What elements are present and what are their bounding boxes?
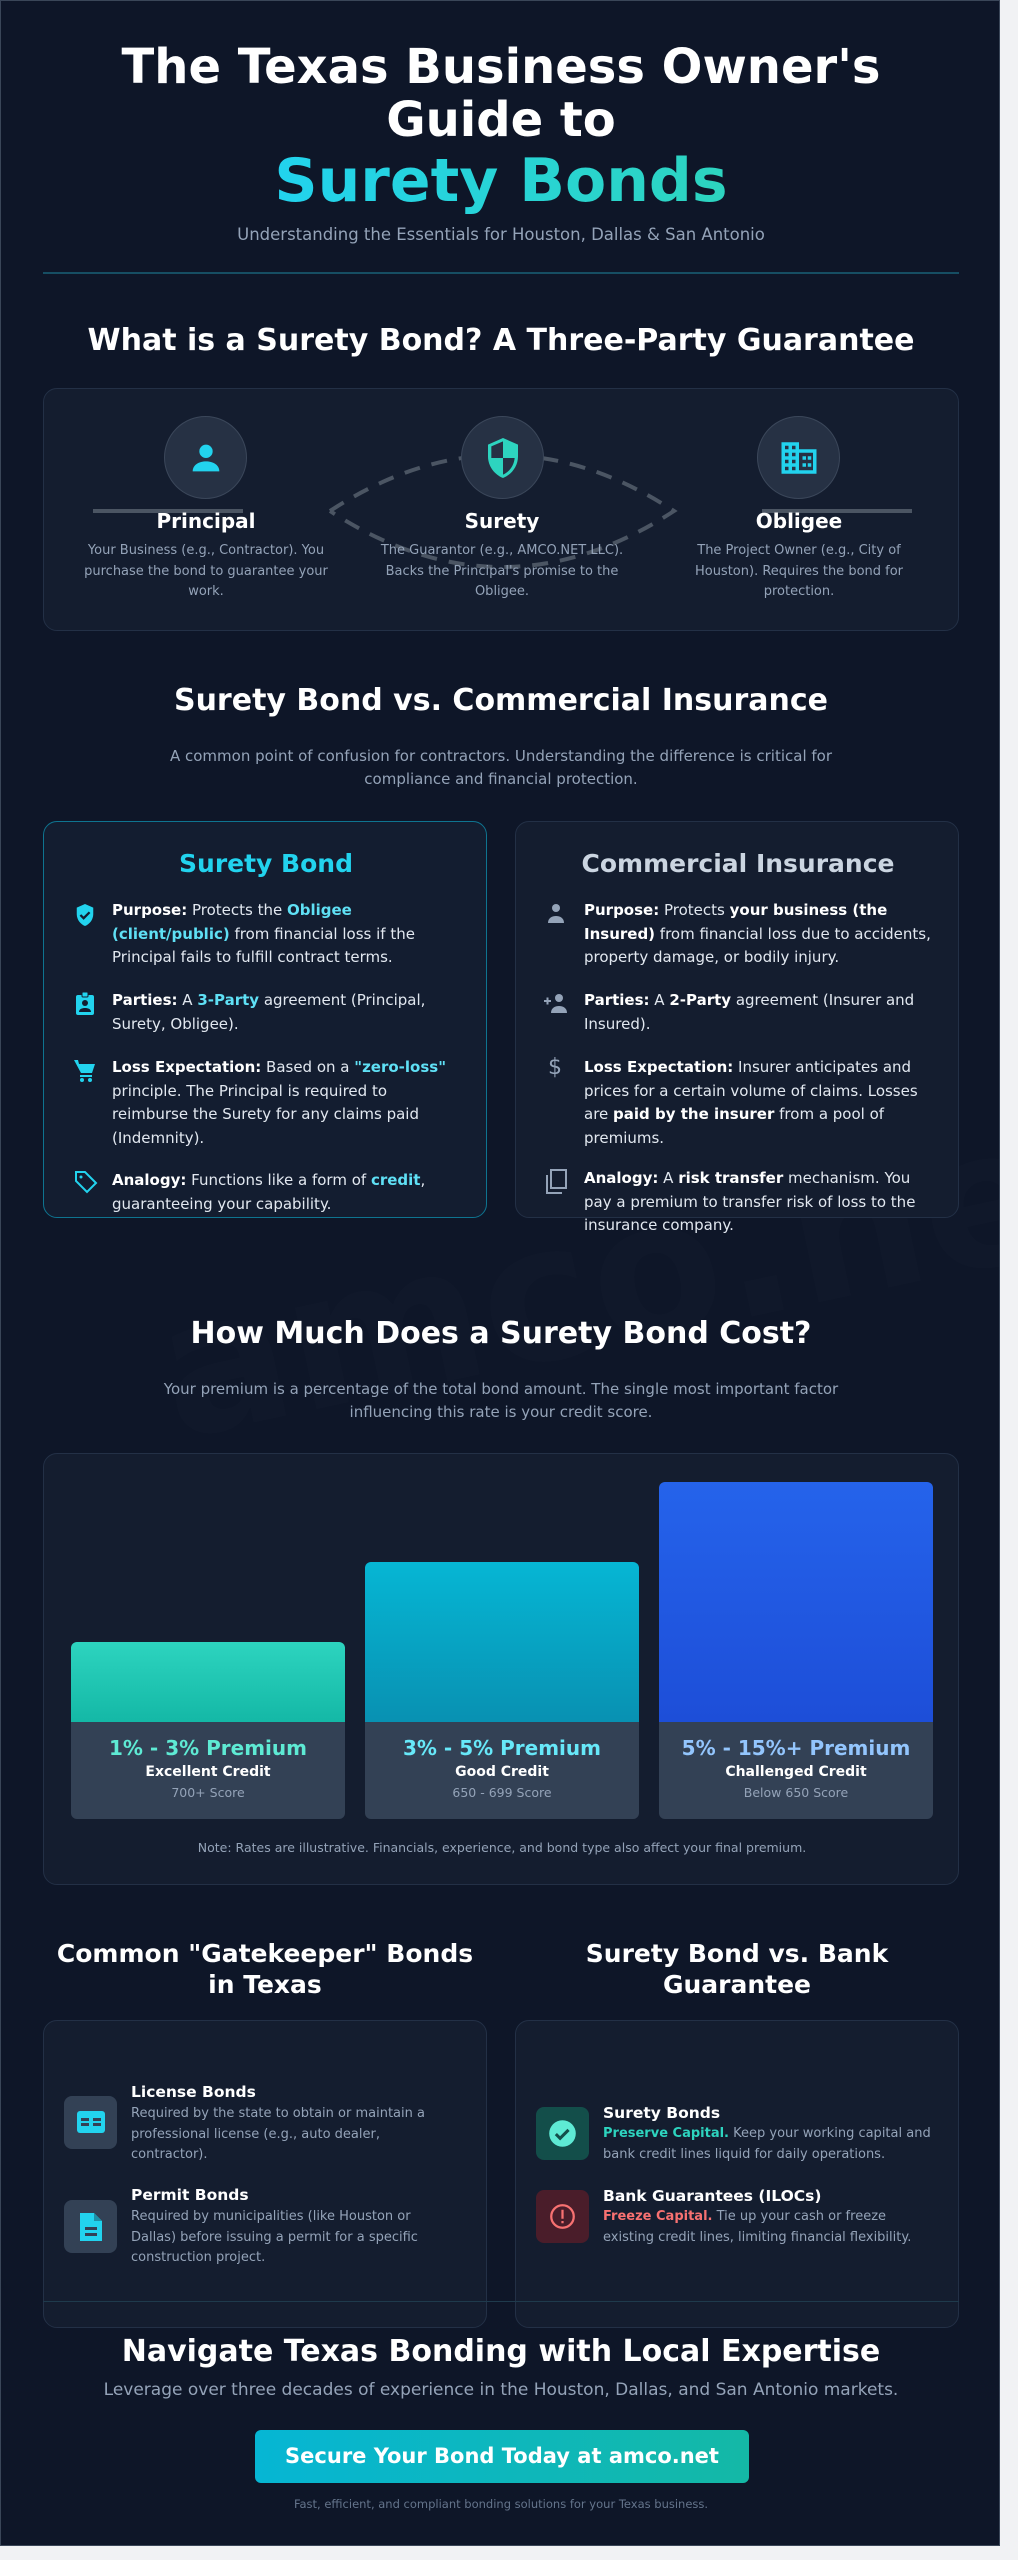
bar: good: 650 - 699 Score bbox=[452, 1785, 552, 1800]
diagram lines bbox=[93, 456, 912, 569]
icon: shield check bbox=[76, 904, 94, 926]
bar: good: 3% - 5% Premium bbox=[403, 1736, 601, 1760]
heading: navigate: Navigate Texas Bonding with Local Expertise bbox=[122, 2334, 880, 2369]
label: principal bbox=[84, 509, 328, 599]
icon: person add bbox=[544, 994, 567, 1013]
subtitle: vs insurance: A common point of confusion for contractors. Understanding the difference is critical for compliance and financial protection. bbox=[170, 747, 832, 788]
panel: bank guarantee: Preserve Capital. Keep your working capital and bank credit lines liquid for daily operations. bbox=[603, 2126, 931, 2162]
subtitle: Understanding the Essentials for Houston, Dallas & San Antonio bbox=[237, 225, 765, 244]
label: surety bbox=[380, 509, 623, 599]
text: surety bonds: Surety Bonds bbox=[603, 2104, 720, 2122]
label: surety: Surety bbox=[465, 509, 539, 533]
bar: excellent: 1% - 3% Premium bbox=[109, 1736, 307, 1760]
icon: tag bbox=[75, 1171, 98, 1194]
bar: excellent: 700+ Score bbox=[171, 1785, 245, 1800]
label: obligee: Obligee bbox=[756, 509, 842, 533]
card heading: Surety Bond bbox=[179, 849, 353, 878]
subtitle: cost: Your premium is a percentage of the total bond amount. The single most important factor influencing this rate is your credit score. bbox=[164, 1380, 838, 1421]
icon: check bbox=[536, 2107, 589, 2160]
icon: obligee building bbox=[757, 416, 840, 499]
item: analogy: Analogy: A risk transfer mechanism. You pay a premium to transfer risk of loss to the insurance company. bbox=[584, 1169, 915, 1234]
icon: alert bbox=[536, 2190, 589, 2243]
heading: cost: How Much Does a Surety Bond Cost? bbox=[191, 1316, 811, 1351]
heading: vs insurance: Surety Bond vs. Commercial Insurance bbox=[174, 683, 828, 718]
label: obligee: The Project Owner (e.g., City of Houston). Requires the bond for protection. bbox=[695, 543, 903, 599]
bar chart bbox=[43, 1453, 959, 1885]
icon: surety shield bbox=[461, 416, 544, 499]
text: permit bonds: Permit Bonds bbox=[131, 2186, 249, 2204]
heading: gatekeeper bonds: Common "Gatekeeper" Bonds in Texas bbox=[57, 1939, 473, 1999]
label: principal: Your Business (e.g., Contractor). You purchase the bond to guarantee your work. bbox=[84, 543, 328, 599]
panel: three-party diagram bbox=[43, 388, 959, 631]
panel: surety bond card bbox=[43, 821, 487, 1218]
bar: good: Good Credit bbox=[455, 1764, 549, 1780]
label: surety: The Guarantor (e.g., AMCO.NET LLC). Backs the Principal's promise to the Obligee. bbox=[381, 543, 623, 599]
icon: badge bbox=[76, 992, 94, 1015]
panel: bank guarantee: Freeze Capital. Tie up your cash or freeze existing credit lines, limiting financial flexibility. bbox=[603, 2209, 911, 2244]
subtitle: navigate: Leverage over three decades of experience in the Houston, Dallas, and San Antonio markets. bbox=[104, 2380, 898, 2400]
item: loss expectation: Loss Expectation: Based on a "zero-loss" principle. The Principal is required to reimburse the Surety for any claims paid (Indemnity). bbox=[112, 1058, 446, 1146]
panel: bank guarantee bbox=[515, 2020, 959, 2328]
bar: excellent: Excellent Credit bbox=[145, 1764, 271, 1780]
panel: gatekeeper bonds bbox=[43, 2020, 487, 2328]
icon: cart bbox=[74, 1060, 95, 1082]
bar: challenged bbox=[659, 1482, 933, 1819]
icon: dollar: $ bbox=[548, 1055, 562, 1080]
card heading: Commercial Insurance bbox=[582, 849, 894, 878]
panel: gatekeeper bonds: Required by the state to obtain or maintain a professional license (e.g., auto dealer, contractor). bbox=[131, 2106, 425, 2162]
button: CTA bbox=[255, 2430, 749, 2483]
bar: challenged: Below 650 Score bbox=[744, 1785, 848, 1800]
text: license bonds: License Bonds bbox=[131, 2083, 256, 2101]
icon: copy bbox=[546, 1169, 567, 1194]
item: purpose: Purpose: Protects the Obligee (client/public) from financial loss if the Principal fails to fulfill contract terms. bbox=[112, 901, 415, 966]
icon: license bbox=[64, 2096, 117, 2149]
icon: principal bbox=[164, 416, 247, 499]
bar: challenged: 5% - 15%+ Premium bbox=[682, 1736, 910, 1760]
title bbox=[122, 39, 880, 148]
icon: permit bbox=[64, 2200, 117, 2253]
button: CTA: Secure Your Bond Today at amco.net bbox=[285, 2444, 719, 2468]
title highlight: Surety Bonds bbox=[274, 146, 728, 216]
heading: three-party: What is a Surety Bond? A Three-Party Guarantee bbox=[88, 323, 914, 358]
bar: good bbox=[365, 1562, 639, 1819]
item: parties: Parties: A 3-Party agreement (Principal, Surety, Obligee). bbox=[112, 991, 425, 1032]
item: analogy: Analogy: Functions like a form of credit, guaranteeing your capability. bbox=[112, 1171, 425, 1212]
bar: excellent bbox=[71, 1642, 345, 1819]
icon: person bbox=[548, 904, 564, 923]
panel: gatekeeper bonds: Required by municipalities (like Houston or Dallas) before issuing a permit for a specific construction project. bbox=[131, 2209, 418, 2265]
bar: challenged: Challenged Credit bbox=[725, 1764, 867, 1780]
panel: commercial insurance card bbox=[515, 821, 959, 1218]
heading: bank guarantee: Surety Bond vs. Bank Guarantee bbox=[586, 1939, 888, 1999]
label: principal: Principal bbox=[156, 509, 256, 533]
title: The Texas Business Owner's bbox=[122, 39, 880, 95]
item: purpose: Purpose: Protects your business (the Insured) from financial loss due to accidents, property damage, or bodily injury. bbox=[584, 901, 931, 966]
chart note: Note: Rates are illustrative. Financials, experience, and bond type also affect your final premium. bbox=[198, 1840, 806, 1855]
label: obligee bbox=[695, 509, 903, 599]
item: parties: Parties: A 2-Party agreement (Insurer and Insured). bbox=[584, 991, 914, 1032]
footer note: Fast, efficient, and compliant bonding solutions for your Texas business. bbox=[294, 2497, 708, 2511]
title: Guide to bbox=[386, 92, 616, 148]
item: loss expectation: Loss Expectation: Insurer anticipates and prices for a certain volume of claims. Losses are paid by the insurer from a pool of premiums. bbox=[584, 1058, 918, 1146]
text: bank guarantees: Bank Guarantees (ILOCs) bbox=[603, 2187, 821, 2205]
